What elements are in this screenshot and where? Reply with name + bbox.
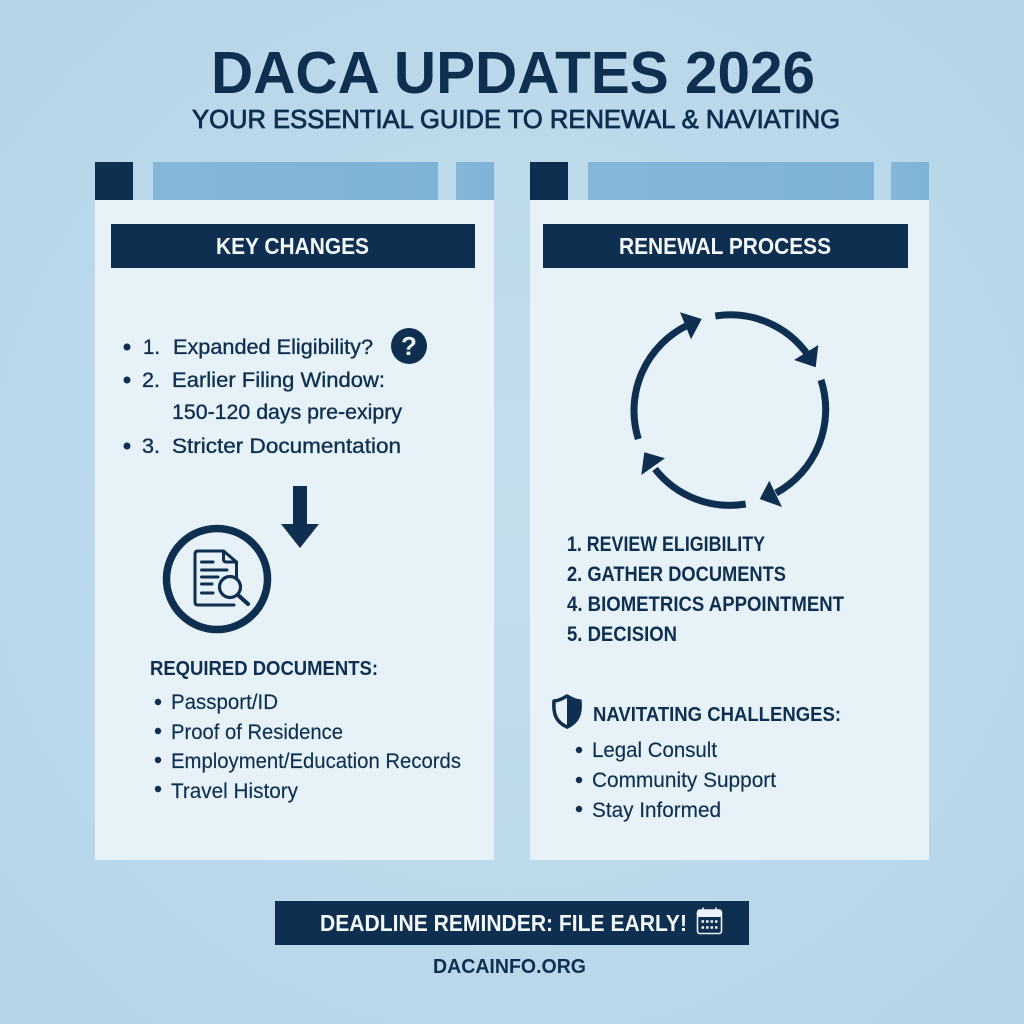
icon: document with magnifier xyxy=(166,528,268,630)
icon: question mark: ? xyxy=(401,331,417,361)
navigating challenges list: Stay Informed xyxy=(592,799,721,822)
cycle arrows xyxy=(634,312,826,507)
renewal steps list: 5. DECISION xyxy=(567,622,677,646)
panel: renewal process xyxy=(530,162,929,860)
heading: key changes xyxy=(111,224,475,268)
heading: renewal process: RENEWAL PROCESS xyxy=(619,233,831,259)
icon: question mark xyxy=(391,328,427,364)
navigating challenges list xyxy=(576,739,776,822)
renewal steps list: 4. BIOMETRICS APPOINTMENT xyxy=(567,592,844,616)
key changes list: 1. xyxy=(143,336,160,359)
heading: renewal process xyxy=(543,224,908,268)
key changes list: 3. xyxy=(142,435,160,458)
renewal steps list: 2. GATHER DOCUMENTS xyxy=(567,562,786,586)
subtitle: YOUR ESSENTIAL GUIDE TO RENEWAL & NAVIATING xyxy=(192,104,840,134)
key changes list: Earlier Filing Window: xyxy=(172,369,385,392)
icon: shield xyxy=(554,695,581,729)
right panel tabs xyxy=(530,162,929,200)
arrow: down xyxy=(281,486,319,548)
navigating challenges list: Community Support xyxy=(592,769,776,792)
deadline banner xyxy=(275,901,749,945)
required documents list: Proof of Residence xyxy=(171,721,343,744)
key changes list: 150-120 days pre-exipry xyxy=(172,401,402,424)
navigating challenges list: Legal Consult xyxy=(592,739,717,762)
required documents list xyxy=(155,691,461,803)
key changes list: Expanded Eligibility? xyxy=(173,336,373,359)
title: DACA UPDATES 2026 xyxy=(211,40,815,106)
required documents list: Travel History xyxy=(171,780,298,803)
renewal steps list xyxy=(567,532,844,646)
key changes list: Stricter Documentation xyxy=(172,435,401,458)
deadline banner: DEADLINE REMINDER: FILE EARLY! xyxy=(320,910,687,936)
left panel tabs xyxy=(95,162,494,200)
left panel background xyxy=(95,200,494,860)
website: DACAINFO.ORG xyxy=(433,955,586,978)
key changes list: 2. xyxy=(142,369,160,392)
right panel background xyxy=(530,200,929,860)
renewal steps list: 1. REVIEW ELIGIBILITY xyxy=(567,532,765,556)
required documents heading: REQUIRED DOCUMENTS: xyxy=(150,658,378,680)
heading: key changes: KEY CHANGES xyxy=(216,233,369,259)
panel: key changes xyxy=(95,162,494,860)
required documents list: Employment/Education Records xyxy=(171,750,461,773)
navigating challenges heading: NAVITATING CHALLENGES: xyxy=(593,703,841,726)
required documents list: Passport/ID xyxy=(171,691,278,714)
key changes list xyxy=(124,336,402,458)
icon: calendar xyxy=(698,908,722,934)
